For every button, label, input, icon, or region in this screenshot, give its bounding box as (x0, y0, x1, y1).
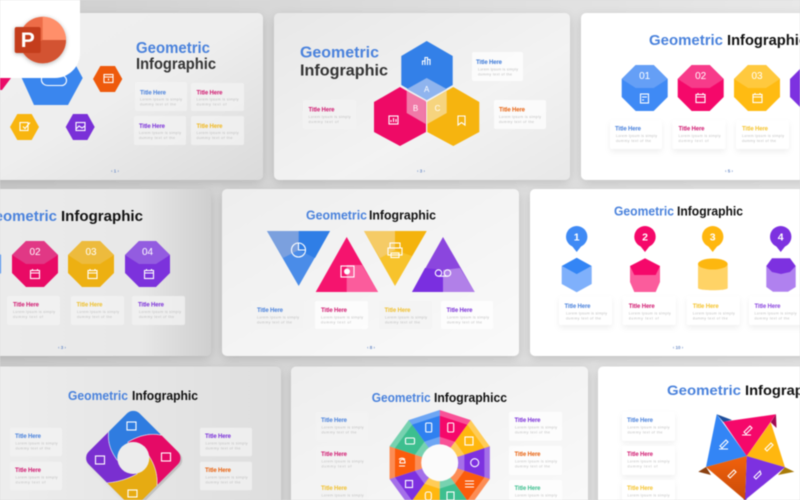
heading: slide 8 (372, 391, 507, 405)
octagon 04 (125, 241, 170, 287)
heading: slide 8: Geometric (372, 391, 431, 405)
card: pink (623, 296, 676, 325)
heading: slide 7 (68, 389, 198, 403)
heading: slide 2 (300, 44, 388, 80)
card: pink: Lorem Ipsum is simply (321, 316, 363, 320)
card: purple: Lorem Ipsum is simply (139, 310, 181, 314)
card: orange: Lorem Ipsum is simply (499, 115, 541, 119)
card: blue: Lorem Ipsum is simply (628, 426, 670, 430)
card: pink: dummy text of (629, 316, 659, 320)
card: blue: Lorem Ipsum is simply (566, 312, 607, 316)
card: blue: Title Here (627, 418, 654, 424)
decagon wheel chart (380, 402, 499, 500)
card: yellow: Title Here (384, 308, 411, 314)
heading: slide 2: Infographic (300, 63, 388, 80)
card: pink: dummy text of (628, 464, 658, 468)
card: blue: dummy text of the (566, 316, 601, 320)
heading: slide 4 (0, 209, 143, 225)
card: yellow (379, 301, 432, 329)
card: yellow: Lorem Ipsum is simply (77, 310, 119, 314)
card: blue: Lorem Ipsum is simply (140, 98, 182, 102)
heading: slide 1: Infographic (136, 56, 216, 73)
card: purple: Title Here (205, 434, 232, 440)
panel: slide 2 overlapping hexagons (274, 13, 570, 180)
card: orange (200, 462, 252, 490)
triangle 4 purple (412, 237, 475, 292)
page number: ‹ 3 › (58, 345, 66, 350)
card: blue: Title Here (15, 434, 42, 440)
card: yellow: Title Here (76, 302, 103, 308)
venn hexagons (374, 41, 479, 146)
card: purple (132, 296, 185, 325)
card: blue: dummy text of the (16, 447, 50, 451)
card: blue (559, 296, 612, 325)
pin 3 (702, 226, 723, 252)
card: purple: Lorem Ipsum is simply (515, 426, 557, 430)
card: purple: Lorem Ipsum is simply (206, 442, 248, 446)
octagon 01 (622, 65, 668, 111)
card: blue (610, 120, 662, 149)
card: pink: dummy text of (16, 481, 46, 485)
heading: slide 5: Geometric (306, 208, 367, 222)
card: blue: Lorem Ipsum is simply (478, 68, 518, 72)
pin 3: 3 (710, 232, 716, 244)
card: orange: dummy text of the (206, 481, 240, 485)
heading: slide 2: Geometric (300, 44, 379, 61)
card: purple: Title Here (139, 124, 166, 130)
solid: cylinder (698, 258, 728, 290)
octagon 04 (790, 65, 800, 111)
card: blue (472, 52, 523, 81)
card: purple (134, 116, 186, 145)
card: pink (10, 462, 62, 490)
card: purple: Lorem Ipsum is simply (139, 131, 181, 135)
heading: slide 5 (306, 208, 436, 222)
card: blue: Lorem Ipsum is simply (257, 316, 299, 320)
card: purple (749, 296, 800, 325)
card: purple: dummy text of the (754, 316, 790, 320)
heading: slide 3 (649, 33, 800, 49)
card: pink: dummy text of (321, 320, 351, 324)
card: pink: dummy text of (196, 102, 226, 106)
card: pink: Lorem Ipsum is simply (629, 312, 671, 316)
card: yellow (191, 116, 244, 145)
triangle 2 pink (316, 237, 378, 292)
panel: slide 9 folded star (598, 366, 800, 500)
hexagon group (0, 51, 122, 140)
heading: slide 9 (667, 382, 800, 398)
card: pink: Lorem Ipsum is simply (308, 115, 351, 119)
heading: slide 6: Infographic (677, 205, 743, 219)
card: yellow: Title Here (321, 486, 348, 492)
card: yellow: Lorem Ipsum is simply (693, 312, 735, 316)
card: green: Lorem Ipsum is simply (515, 494, 557, 498)
card: orange: Lorem Ipsum is simply (515, 460, 557, 464)
card: yellow: Lorem Ipsum is simply (385, 316, 427, 320)
card: yellow: Title Here (627, 486, 654, 492)
heading: slide 8: Infographicc (434, 391, 507, 405)
card: blue: Title Here (615, 126, 642, 132)
card: blue: dummy text of the (322, 431, 356, 435)
card: pink (316, 446, 368, 475)
card: pink (191, 83, 244, 111)
card: pink: Title Here (321, 452, 348, 458)
card: pink: Title Here (678, 126, 705, 132)
pin 1: 1 (574, 232, 580, 244)
icon: PowerPoint badge (0, 0, 80, 78)
card: yellow: dummy text of the (196, 136, 232, 140)
card: purple: dummy text of the (139, 315, 174, 319)
card: pink: Lorem Ipsum is simply (13, 310, 55, 314)
card: purple: Title Here (754, 304, 781, 310)
octagon 02 (12, 241, 58, 287)
panel: slide 8 decagon wheel (291, 366, 588, 500)
card: pink: Lorem Ipsum is simply (322, 460, 364, 464)
card: blue (10, 428, 62, 456)
card: blue: Lorem Ipsum is simply (16, 442, 58, 446)
card: purple: dummy text of the (447, 320, 482, 324)
heading: slide 9: Geometric (667, 382, 741, 398)
card: blue: Lorem Ipsum is simply (616, 134, 657, 138)
card: pink: Title Here (196, 90, 223, 96)
card: pink: Title Here (321, 308, 348, 314)
triangle 3 yellow (364, 231, 427, 286)
card: blue: dummy text of the (616, 139, 651, 143)
card: purple: Title Here (514, 418, 541, 424)
card: yellow: Lorem Ipsum is simply (322, 494, 364, 498)
page number: ‹ 1 › (111, 168, 119, 174)
card: yellow: Lorem Ipsum is simply (628, 494, 670, 498)
heading: slide 5: Infographic (369, 208, 436, 222)
card: purple (200, 428, 252, 456)
card: yellow (736, 120, 789, 149)
card: pink: Lorem Ipsum is simply (196, 98, 239, 102)
card: pink: Title Here (13, 302, 40, 308)
card: blue (622, 412, 675, 441)
octagon 02: 02 (29, 247, 41, 258)
card: green: Title Here (514, 486, 541, 492)
card: yellow (316, 480, 368, 500)
card: orange: Title Here (499, 108, 526, 114)
panel: slide 4 octagons (0, 189, 211, 356)
card: blue: Title Here (476, 60, 503, 66)
card: pink (672, 120, 726, 149)
card: purple: dummy text of the (139, 136, 175, 140)
pin 1 (566, 226, 587, 252)
page number: ‹ 8 › (367, 345, 375, 350)
card: yellow: dummy text of the (693, 316, 728, 320)
card: purple: Lorem Ipsum is simply (754, 312, 797, 316)
octagon 01: 01 (639, 71, 651, 82)
card: orange: Title Here (205, 468, 232, 474)
pin 4 (770, 226, 791, 252)
card: orange (509, 446, 562, 475)
card: pink (315, 301, 368, 329)
card: yellow: Title Here (196, 124, 223, 130)
panel: slide 6 pins and solids (530, 189, 800, 356)
card: pink: dummy text of (678, 139, 708, 143)
page number: ‹ 10 › (673, 345, 684, 350)
card: yellow (622, 480, 675, 500)
octagon 01 (0, 241, 1, 287)
panel: slide 1 hexagons with four titles (0, 13, 263, 180)
octagon 03 (734, 65, 780, 111)
heading: slide 1: Geometric (136, 40, 210, 57)
card: orange: dummy text of the (515, 464, 550, 468)
page number: ‹ 3 › (417, 168, 425, 174)
card: purple: Lorem Ipsum is simply (447, 316, 489, 320)
panel: slide 5 triangles (222, 189, 519, 356)
swirl diamond chart (85, 410, 182, 500)
card: pink (622, 446, 675, 475)
card: yellow: dummy text of the (77, 315, 112, 319)
panel: slide 7 swirl diamond (0, 366, 281, 500)
card: yellow (71, 296, 124, 325)
heading: slide 7: Infographic (132, 389, 198, 403)
solid: hexagonal prism (766, 258, 796, 292)
card: blue (252, 301, 304, 329)
octagon 02 (678, 65, 724, 111)
octagon 03 (68, 241, 114, 287)
card: blue: dummy text of the (628, 431, 662, 435)
heading: slide 6: Geometric (614, 205, 674, 219)
folded star chart (698, 414, 794, 500)
octagon 04: 04 (142, 247, 153, 258)
card: pink: Title Here (15, 468, 42, 474)
pin 2: 2 (642, 232, 648, 244)
card: yellow: dummy text of the (742, 139, 776, 143)
card: pink: Lorem Ipsum is simply (628, 460, 670, 464)
card: blue: Title Here (257, 308, 284, 314)
card: yellow (687, 296, 740, 325)
octagon 03: 03 (85, 247, 97, 258)
heading: slide 3: Geometric (649, 33, 723, 49)
heading: slide 1 (136, 40, 216, 73)
icon: PowerPoint badge: P (21, 29, 35, 52)
venn hexagons: C (435, 104, 441, 113)
pin 4: 4 (778, 232, 784, 244)
card: pink (7, 296, 60, 325)
card: yellow: dummy text of the (385, 320, 420, 324)
page number: ‹ 5 › (725, 168, 733, 174)
card: orange: Lorem Ipsum is simply (206, 476, 248, 480)
card: pink: Title Here (629, 304, 655, 310)
card: pink: Lorem Ipsum is simply (16, 476, 58, 480)
card: pink (303, 100, 356, 129)
card: blue (316, 412, 368, 441)
card: pink: Lorem Ipsum is simply (678, 134, 721, 138)
triangle 1 blue (267, 231, 330, 286)
panel: slide 3 octagons (581, 13, 800, 180)
octagon 03: 03 (751, 71, 763, 82)
card: orange (494, 100, 546, 129)
card: pink: Title Here (308, 108, 335, 114)
card: blue: Lorem Ipsum is simply (322, 426, 364, 430)
card: yellow: Lorem Ipsum is simply (196, 131, 239, 135)
card: blue: dummy text of the (478, 72, 512, 76)
card: yellow: Lorem Ipsum is simply (742, 134, 784, 138)
card: purple (441, 301, 493, 329)
card: blue: Title Here (140, 90, 167, 96)
card: purple: Title Here (446, 308, 473, 314)
card: blue: dummy text of the (257, 320, 292, 324)
venn hexagons: A (424, 85, 430, 94)
card: purple: Title Here (138, 302, 165, 308)
card: purple: dummy text of the (515, 431, 550, 435)
card: green (509, 480, 562, 500)
card: pink: dummy text of (13, 315, 43, 319)
heading: slide 4: Infographic (61, 209, 143, 225)
card: purple (509, 412, 562, 441)
card: pink: dummy text of (322, 464, 352, 468)
heading: slide 6 (614, 205, 743, 219)
card: yellow: Title Here (693, 304, 719, 310)
card: purple: dummy text of the (206, 447, 240, 451)
card: blue: Title Here (564, 304, 591, 310)
card: pink: Title Here (627, 452, 654, 458)
heading: slide 7: Geometric (68, 389, 128, 403)
solid: pentagon prism (630, 258, 660, 292)
card: pink: dummy text of (308, 120, 338, 124)
card: blue: Title Here (321, 418, 348, 424)
card: yellow: Title Here (742, 126, 769, 132)
card: blue: dummy text of the (140, 102, 176, 106)
card: blue (135, 82, 187, 111)
card: orange: dummy text of the (499, 120, 534, 124)
card: orange: Title Here (514, 452, 541, 458)
octagon 02: 02 (695, 71, 707, 82)
solid: cube (562, 258, 592, 292)
pin 2 (634, 226, 656, 252)
venn hexagons: B (413, 104, 418, 113)
